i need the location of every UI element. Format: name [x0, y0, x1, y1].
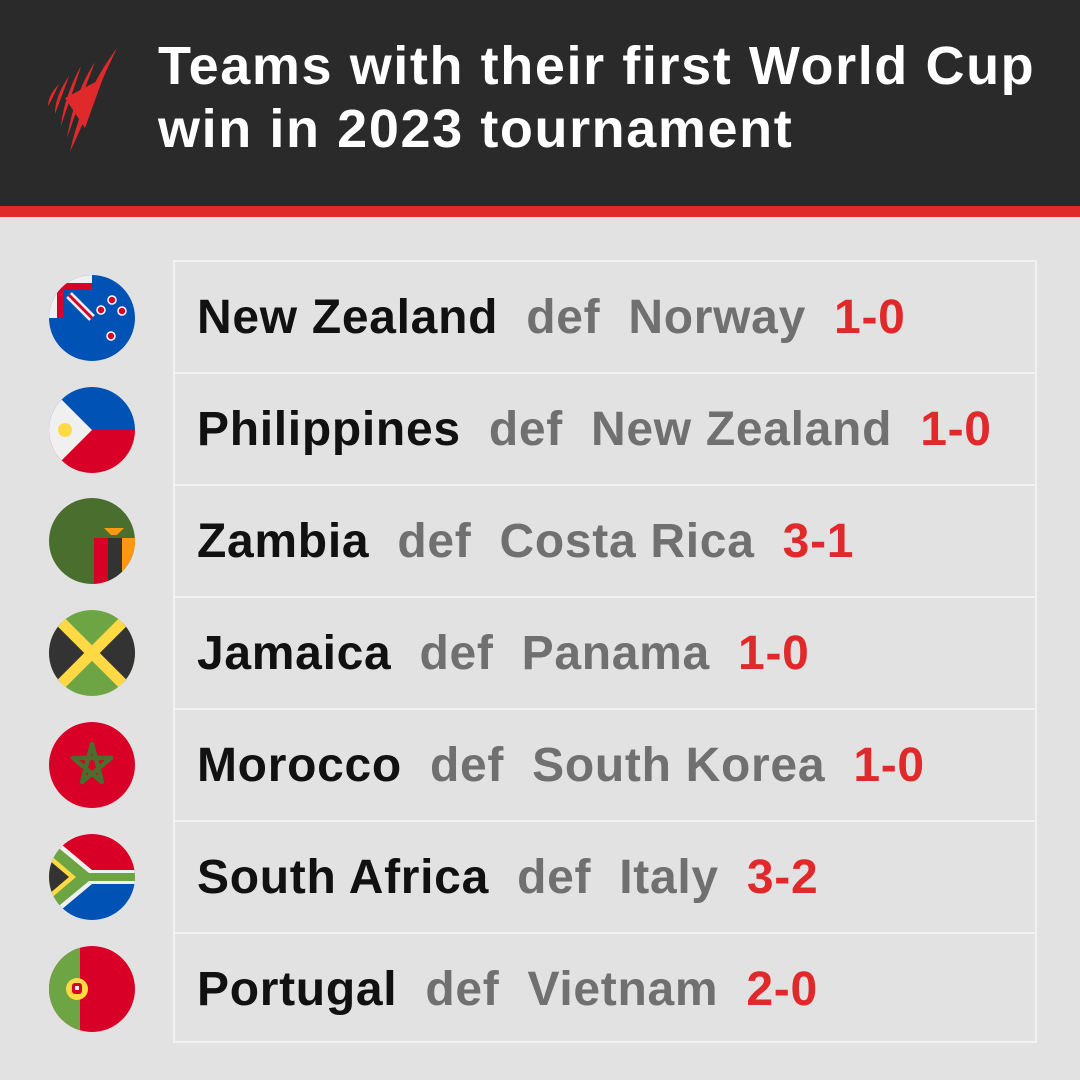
icon: flag New Zealand: [49, 275, 135, 361]
title: Teams with their first World Cup: [158, 36, 1035, 96]
title: win in 2023 tournament: [158, 99, 793, 159]
icon: flag South Africa: [49, 834, 135, 920]
icon: flag Zambia: [49, 498, 135, 584]
row: Jamaica: [175, 598, 1035, 710]
row: New Zealand: New Zealand def Norway 1-0: [197, 291, 906, 344]
row: South Africa: [175, 822, 1035, 934]
row: Zambia: [175, 486, 1035, 598]
row: Philippines: Philippines def New Zealand 1-0: [197, 403, 992, 456]
header: [0, 0, 1080, 206]
row: Zambia: Zambia def Costa Rica 3-1: [197, 515, 854, 568]
row: South Africa: South Africa def Italy 3-2: [197, 851, 818, 904]
icon: flag Portugal: [49, 946, 135, 1032]
table of results: [173, 260, 1037, 1043]
row: Portugal: Portugal def Vietnam 2-0: [197, 963, 818, 1016]
row: Jamaica: Jamaica def Panama 1-0: [197, 627, 810, 680]
icon: logo: [48, 48, 117, 152]
icon: flag Philippines: [49, 387, 135, 473]
icon: flag Jamaica: [49, 610, 135, 696]
row: New Zealand: [175, 262, 1035, 374]
row: Morocco: [175, 710, 1035, 822]
row: Philippines: [175, 374, 1035, 486]
icon: flag Morocco: [49, 722, 135, 808]
title: [158, 36, 1035, 159]
row: Morocco: Morocco def South Korea 1-0: [197, 739, 925, 792]
